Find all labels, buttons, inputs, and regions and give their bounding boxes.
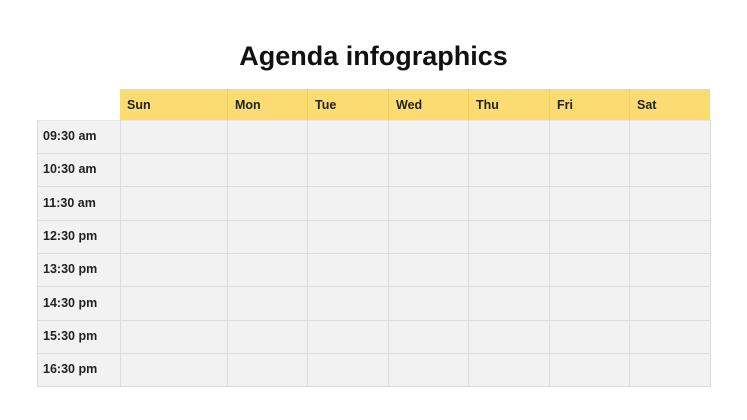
time labels: 12:30 pm <box>43 229 97 243</box>
time labels: 11:30 am <box>43 196 96 210</box>
time labels: 09:30 am <box>43 129 97 143</box>
time labels: 15:30 pm <box>43 329 97 343</box>
grid body <box>37 120 711 387</box>
header row <box>120 89 710 120</box>
header row: Wed <box>396 98 422 112</box>
time labels: 13:30 pm <box>43 262 97 276</box>
time labels <box>43 129 97 376</box>
header row: Fri <box>557 98 573 112</box>
header row: Mon <box>235 98 261 112</box>
time labels: 14:30 pm <box>43 296 97 310</box>
header row: Sat <box>637 98 656 112</box>
title: Agenda infographics <box>239 41 508 71</box>
time labels: 10:30 am <box>43 162 97 176</box>
header row: Sun <box>127 98 151 112</box>
header row: Thu <box>476 98 499 112</box>
header row: Tue <box>315 98 336 112</box>
time labels: 16:30 pm <box>43 362 97 376</box>
